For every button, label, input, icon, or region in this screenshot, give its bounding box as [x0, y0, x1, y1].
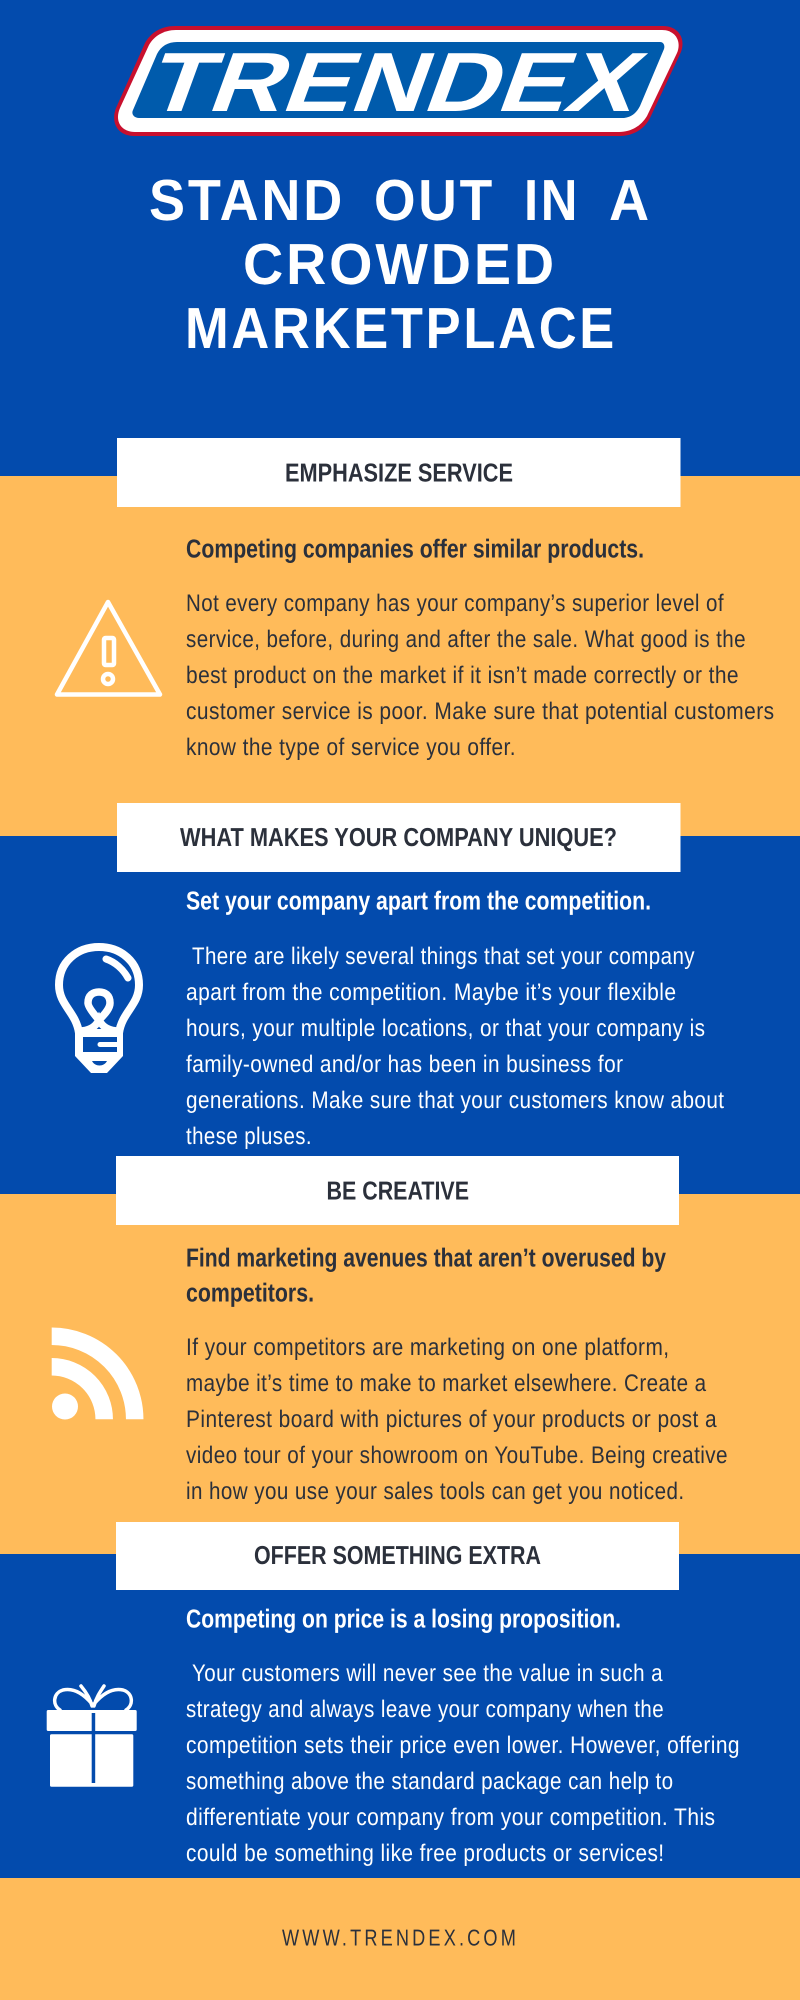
heading banner: extra: [116, 1522, 679, 1590]
subheading: marketing avenues: Find marketing avenues that aren’t overused by: [186, 1242, 666, 1272]
text block: unique: apart from the competition. Maybe it’s your flexible: [186, 979, 676, 1006]
icon: warning triangle: [57, 602, 160, 694]
title: MARKETPLACE: [185, 296, 617, 361]
panel: what makes your company unique: [0, 803, 800, 1194]
title: A: [609, 168, 652, 233]
panel: offer something extra: [0, 1522, 800, 1878]
heading banner: unique: WHAT MAKES YOUR COMPANY UNIQUE?: [180, 822, 617, 852]
text block: service: [186, 590, 774, 761]
heading banner: emphasize service: EMPHASIZE SERVICE: [285, 458, 513, 488]
icon: light bulb: [59, 947, 139, 1073]
subheading: competing companies: Competing companies offer similar products.: [186, 534, 644, 564]
heading banner: emphasize service: [117, 438, 680, 507]
text block: unique: generations. Make sure that your customers know about: [186, 1087, 724, 1114]
text block: creative: video tour of your showroom on YouTube. Being creative: [186, 1442, 728, 1469]
title: OUT: [374, 168, 495, 233]
subheading: marketing avenues: competitors.: [186, 1278, 314, 1308]
text block: extra: could be something like free products or services!: [186, 1840, 664, 1867]
title: IN: [524, 168, 580, 233]
subheading: set apart: Set your company apart from the competition.: [186, 886, 651, 916]
text block: creative: Pinterest board with pictures of your products or post a: [186, 1406, 717, 1433]
panel: be creative: [0, 1156, 800, 1554]
text block: service: Not every company has your company’s superior level of: [186, 590, 724, 617]
text block: unique: hours, your multiple locations, or that your company is: [186, 1015, 706, 1042]
icon: rss feed: [52, 1336, 135, 1420]
text block: extra: Your customers will never see the value in such a: [192, 1660, 663, 1687]
logo: Trendex: [114, 26, 682, 136]
text block: creative: maybe it’s time to make to market elsewhere. Create a: [186, 1370, 707, 1397]
text block: unique: these pluses.: [186, 1123, 312, 1150]
logo: Trendex: TRENDEX: [136, 35, 658, 129]
footer url: WWW.TRENDEX.COM: [282, 1924, 519, 1950]
title: CROWDED: [243, 232, 557, 297]
text block: unique: [186, 943, 724, 1150]
heading banner: be creative: BE CREATIVE: [326, 1176, 469, 1206]
text block: unique: family-owned and/or has been in business for: [186, 1051, 624, 1078]
text block: extra: something above the standard package can help to: [186, 1768, 674, 1795]
subheading: marketing avenues: [186, 1242, 666, 1308]
title: [149, 168, 652, 361]
text block: creative: in how you use your sales tools can get you noticed.: [186, 1478, 684, 1505]
text block: creative: If your competitors are marketing on one platform,: [186, 1334, 670, 1361]
icon: gift box: [47, 1686, 137, 1787]
heading banner: extra: OFFER SOMETHING EXTRA: [254, 1540, 541, 1570]
panel: footer: [0, 1878, 800, 2000]
panel: emphasize service: [0, 438, 800, 836]
heading banner: unique: [117, 803, 680, 872]
panel: header: [0, 0, 800, 476]
text block: service: know the type of service you offer.: [186, 734, 516, 761]
text block: extra: [186, 1660, 740, 1867]
text block: extra: differentiate your company from your competition. This: [186, 1804, 716, 1831]
subheading: competing on price: Competing on price is a losing proposition.: [186, 1604, 621, 1634]
text block: extra: strategy and always leave your company when the: [186, 1696, 664, 1723]
text block: unique: There are likely several things that set your company: [192, 943, 695, 970]
heading banner: be creative: [116, 1156, 679, 1225]
title: STAND: [149, 168, 345, 233]
text block: creative: [186, 1334, 728, 1505]
